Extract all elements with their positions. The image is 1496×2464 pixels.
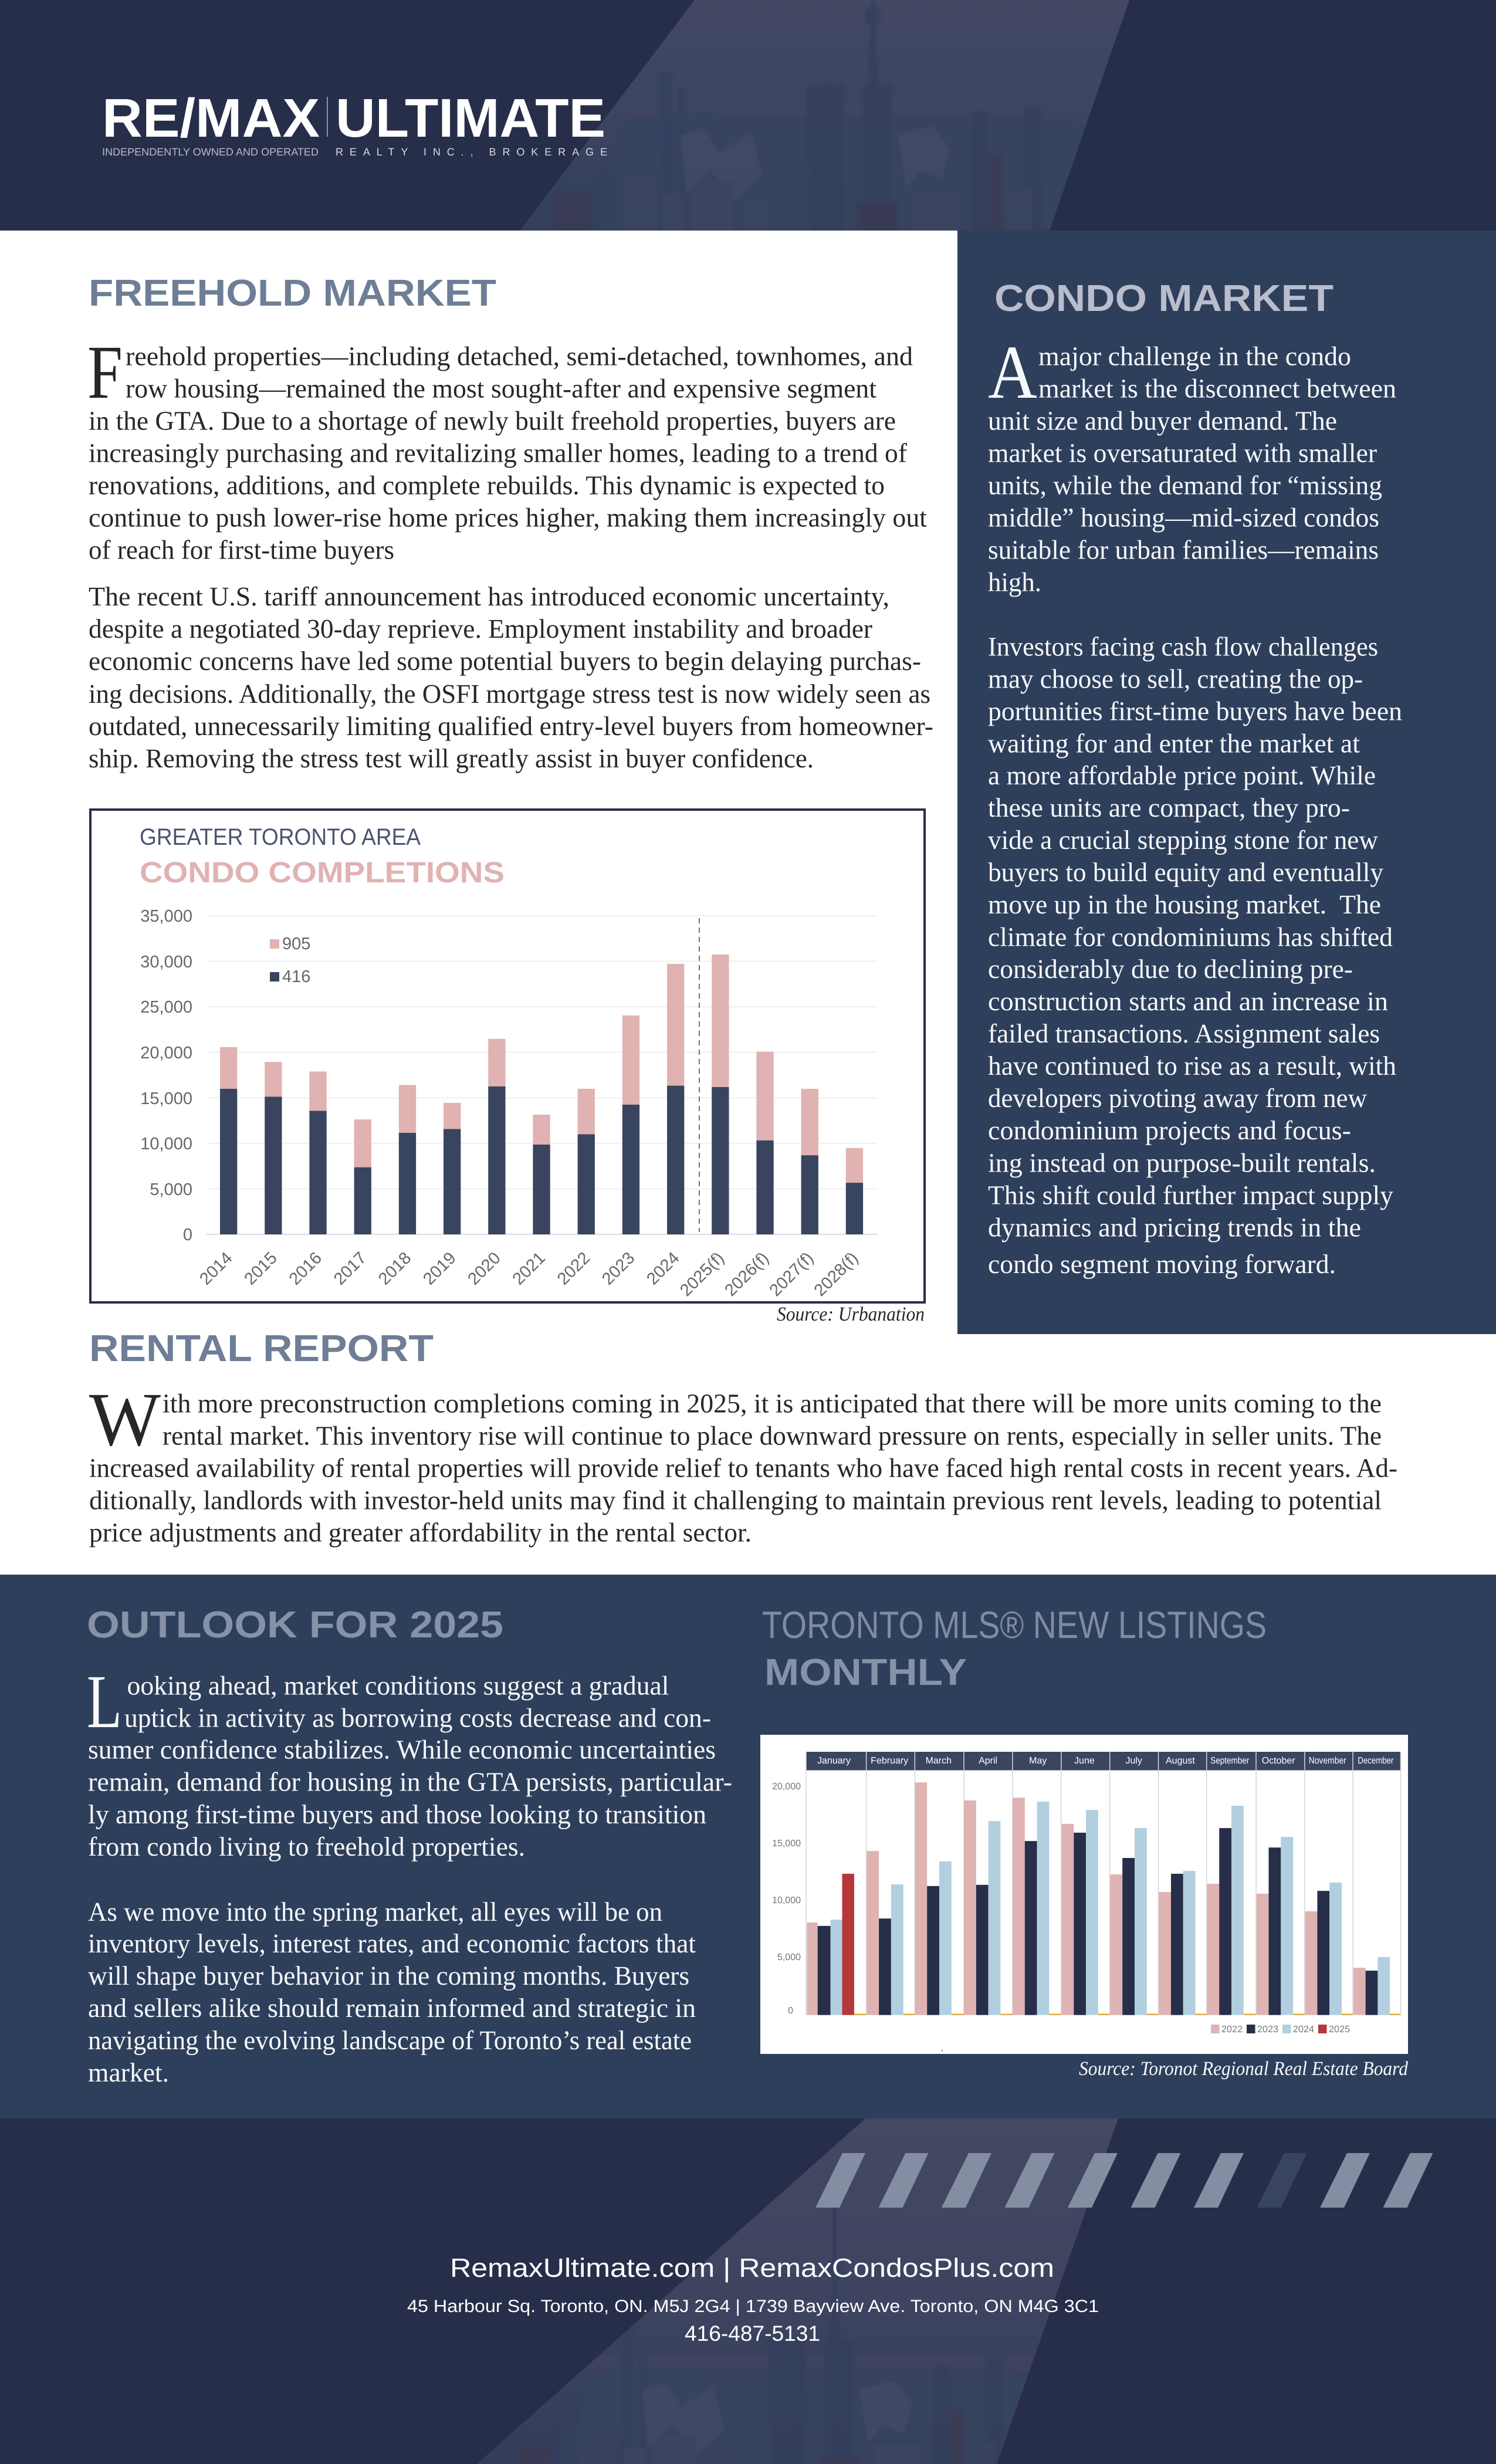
x axis labels: 2014 <box>196 1248 236 1289</box>
text block: freehold paragraph one: reehold properties—including detached, semi-detached, townhomes, and <box>126 341 913 371</box>
text block: outlook paragraph one: L <box>87 1660 122 1744</box>
panel: condo market <box>957 231 1496 1334</box>
stacked bars: 416 series <box>220 1086 863 1234</box>
logo: RE/MAX <box>102 87 320 148</box>
text block: condo paragraph one: major challenge in the condo <box>1038 341 1351 371</box>
text block: outlook paragraph one: remain, demand for housing in the GTA persists, particular- <box>88 1767 732 1797</box>
text block: freehold paragraph two: outdated, unnecessarily limiting qualified entry-level buyers from homeowner- <box>89 711 933 741</box>
chart: condo completions <box>90 810 925 1302</box>
logo <box>102 87 607 158</box>
text block: rental paragraph: ditionally, landlords with investor-held units may find it challenging to maintain previous rent levels, leading to potential <box>89 1485 1382 1515</box>
y axis labels: 10,000 <box>140 1135 192 1153</box>
text block: outlook paragraph two: market. <box>88 2057 169 2087</box>
text block: condo paragraph one: middle” housing—mid-sized condos <box>988 503 1379 533</box>
text block: condo paragraph two: climate for condominiums has shifted <box>988 922 1393 952</box>
text block: outlook paragraph one <box>87 1660 732 1861</box>
text block: outlook paragraph one: uptick in activity as borrowing costs decrease and con- <box>124 1703 711 1732</box>
text block: rental paragraph: price adjustments and greater affordability in the rental sector. <box>89 1518 752 1548</box>
month header row: November <box>1309 1756 1346 1766</box>
x axis labels: 2024 <box>643 1248 683 1289</box>
heading: toronto mls new listings: TORONTO MLS® NEW LISTINGS <box>762 1603 1267 1646</box>
month header row: August <box>1166 1756 1195 1766</box>
bars: 2023 <box>818 1828 1377 2015</box>
x axis labels: 2022 <box>554 1248 594 1289</box>
text block: condo paragraph one: A <box>988 330 1037 415</box>
text block: outlook paragraph two: and sellers alike should remain informed and strategic in <box>88 1993 696 2023</box>
text block: condo paragraph two: condo segment moving forward. <box>988 1249 1336 1279</box>
text block: freehold paragraph two: despite a negotiated 30-day reprieve. Employment instability and broader <box>89 614 872 644</box>
y axis labels: 25,000 <box>140 998 192 1017</box>
chart legend: 2023 <box>1257 2025 1278 2035</box>
month header row: October <box>1262 1756 1295 1766</box>
y axis labels: 5,000 <box>150 1180 192 1199</box>
text block: condo paragraph two: dynamics and pricing trends in the <box>988 1213 1361 1243</box>
text block: condo paragraph two <box>988 631 1402 1279</box>
heading: toronto mls new listings: MONTHLY <box>764 1651 967 1693</box>
contact details <box>407 2253 1099 2345</box>
month header row: December <box>1358 1756 1394 1766</box>
text block: condo paragraph one: units, while the demand for “missing <box>988 471 1382 500</box>
x axis labels: 2017 <box>330 1248 370 1289</box>
text block: condo paragraph two: may choose to sell, creating the op- <box>988 664 1363 694</box>
logo: INDEPENDENTLY OWNED AND OPERATED <box>102 146 319 158</box>
y axis labels: 0 <box>183 1226 192 1244</box>
chart legend: 2024 <box>1293 2025 1314 2035</box>
source: urbanation: Source: Urbanation <box>777 1304 925 1325</box>
x axis labels: 2018 <box>375 1248 415 1289</box>
city skyline beam <box>520 0 1129 236</box>
text block: outlook paragraph one: ooking ahead, market conditions suggest a gradual <box>127 1670 669 1700</box>
chart legend: 2025 <box>1329 2025 1350 2035</box>
chart: monthly new listings <box>760 1735 1408 2054</box>
x axis labels <box>196 1248 862 1300</box>
x axis labels: 2025(f) <box>676 1248 728 1300</box>
chart legend: 2022 <box>1221 2025 1243 2035</box>
y axis labels: 30,000 <box>140 953 192 972</box>
text block: outlook paragraph one: ly among first-time buyers and those looking to transition <box>88 1799 706 1829</box>
y axis labels: 20,000 <box>772 1782 801 1792</box>
text block: freehold paragraph two: ship. Removing the stress test will greatly assist in buyer confidence. <box>89 743 814 773</box>
x axis labels: 2021 <box>509 1248 549 1289</box>
month header row: September <box>1210 1756 1250 1766</box>
text block: condo paragraph two: construction starts and an increase in <box>988 986 1388 1016</box>
text block: freehold paragraph one: F <box>87 330 123 415</box>
header band <box>0 0 1496 236</box>
month header row: March <box>926 1756 952 1766</box>
source: toronto regional real estate board: Source: Toronot Regional Real Estate Board <box>1079 2058 1409 2080</box>
text block: outlook paragraph two: navigating the evolving landscape of Toronto’s real estate <box>88 2025 692 2055</box>
month header row: July <box>1125 1756 1142 1766</box>
month header row: June <box>1074 1756 1095 1766</box>
bars: 2022 <box>807 1782 1366 2015</box>
city skyline beam <box>477 2118 1118 2464</box>
text block: rental paragraph: rental market. This inventory rise will continue to place downward pressure on rents, especially in seller units. The <box>163 1421 1382 1451</box>
text block: freehold paragraph one <box>87 330 927 565</box>
text block: freehold paragraph one: of reach for first-time buyers <box>89 535 394 565</box>
x axis labels: 2028(f) <box>811 1248 862 1300</box>
text block: condo paragraph two: portunities first-time buyers have been <box>988 696 1402 726</box>
text block: condo paragraph one: high. <box>988 567 1041 597</box>
bars: 2024 <box>831 1802 1390 2015</box>
text block: freehold paragraph one: row housing—remained the most sought-after and expensive segment <box>126 374 876 404</box>
text block: condo paragraph two: waiting for and enter the market at <box>988 729 1360 759</box>
text block: condo paragraph one: market is oversaturated with smaller <box>988 438 1377 468</box>
text block: condo paragraph two: have continued to rise as a result, with <box>988 1051 1396 1081</box>
y axis labels: 10,000 <box>772 1896 801 1905</box>
chart title <box>140 824 505 889</box>
x axis labels: 2026(f) <box>721 1248 773 1300</box>
x axis labels: 2023 <box>598 1248 638 1289</box>
text block: outlook paragraph two: inventory levels, interest rates, and economic factors that <box>88 1928 696 1958</box>
bar: january 2025 <box>842 1874 854 2015</box>
contact details: RemaxUltimate.com | RemaxCondosPlus.com <box>450 2253 1054 2283</box>
text block: condo paragraph two: condominium projects and focus- <box>988 1115 1351 1145</box>
y axis labels: 35,000 <box>140 907 192 926</box>
y axis labels: 5,000 <box>777 1952 801 1962</box>
text block: outlook paragraph one: from condo living to freehold properties. <box>88 1832 525 1861</box>
chart legend: 905 <box>282 935 310 953</box>
text block: condo paragraph two: Investors facing cash flow challenges <box>988 631 1378 661</box>
month header row: May <box>1029 1756 1047 1766</box>
text block: rental paragraph <box>89 1377 1397 1548</box>
text block: condo paragraph two: buyers to build equity and eventually <box>988 857 1383 887</box>
text block: outlook paragraph two <box>88 1897 696 2087</box>
text block: condo paragraph two: considerably due to declining pre- <box>988 954 1353 984</box>
y axis labels <box>772 1782 801 2016</box>
text block: rental paragraph: ith more preconstruction completions coming in 2025, it is anticipated that there will be more units coming to the <box>163 1389 1382 1419</box>
text block: outlook paragraph two: will shape buyer behavior in the coming months. Buyers <box>88 1961 689 1991</box>
text block: condo paragraph one: unit size and buyer demand. The <box>988 406 1337 436</box>
panel: freehold market <box>0 231 957 1334</box>
y axis labels: 0 <box>788 2006 793 2016</box>
text block: condo paragraph one <box>988 330 1396 597</box>
text block: freehold paragraph two: economic concerns have led some potential buyers to begin delaying purchas- <box>89 646 921 676</box>
stacked bars: 905 series <box>220 955 863 1183</box>
chart legend: 416 <box>282 967 310 986</box>
text block: rental paragraph: W <box>89 1377 161 1462</box>
month header row: January <box>817 1756 851 1766</box>
logo: ULTIMATE <box>336 87 605 148</box>
heading: condo market: CONDO MARKET <box>994 277 1333 319</box>
chart legend <box>270 935 310 986</box>
chart title: CONDO COMPLETIONS <box>140 856 505 889</box>
logo: REALTY INC., BROKERAGE <box>336 146 607 158</box>
panel: outlook band <box>0 1575 1496 2118</box>
heading: toronto mls new listings <box>762 1603 1267 1693</box>
text block: freehold paragraph one: renovations, additions, and complete rebuilds. This dynamic is expected to <box>89 471 885 500</box>
contact details: 45 Harbour Sq. Toronto, ON. M5J 2G4 | 1739 Bayview Ave. Toronto, ON M4G 3C1 <box>407 2297 1099 2316</box>
x axis labels: 2016 <box>286 1248 326 1289</box>
text block: condo paragraph two: move up in the housing market. The <box>988 889 1381 919</box>
x axis labels: 2027(f) <box>766 1248 817 1300</box>
x axis labels: 2019 <box>419 1248 460 1289</box>
text block: condo paragraph two: these units are compact, they pro- <box>988 793 1350 823</box>
x axis labels: 2020 <box>465 1248 505 1289</box>
text block: freehold paragraph two <box>89 581 933 773</box>
heading: outlook for 2025: OUTLOOK FOR 2025 <box>87 1603 503 1646</box>
contact details: 416-487-5131 <box>685 2321 820 2345</box>
text block: condo paragraph two: failed transactions. Assignment sales <box>988 1018 1380 1048</box>
text block: freehold paragraph one: increasingly purchasing and revitalizing smaller homes, leading to a trend of <box>89 438 908 468</box>
text block: outlook paragraph one: sumer confidence stabilizes. While economic uncertainties <box>88 1735 716 1765</box>
text block: condo paragraph two: vide a crucial stepping stone for new <box>988 825 1379 855</box>
text block: freehold paragraph one: in the GTA. Due to a shortage of newly built freehold properties, buyers are <box>89 406 896 435</box>
decorative stripes <box>815 2153 1433 2208</box>
y axis labels <box>140 907 192 1244</box>
forecast divider <box>699 918 700 1232</box>
footer band <box>0 2118 1496 2464</box>
text block: rental paragraph: increased availability of rental properties will provide relief to tenants who have faced high rental costs in recent years. Ad- <box>89 1453 1397 1483</box>
text block: condo paragraph two: ing instead on purpose-built rentals. <box>988 1148 1376 1178</box>
panel: rental report <box>89 1327 1397 1548</box>
chart title: GREATER TORONTO AREA <box>140 824 421 850</box>
text block: condo paragraph two: a more affordable price point. While <box>988 760 1376 790</box>
month header row <box>806 1752 1401 1771</box>
text block: freehold paragraph two: The recent U.S. tariff announcement has introduced economic uncertainty, <box>89 581 889 611</box>
text block: freehold paragraph one: continue to push lower-rise home prices higher, making them increasingly out <box>89 503 927 533</box>
text block: outlook paragraph two: As we move into the spring market, all eyes will be on <box>88 1897 662 1927</box>
text block: condo paragraph two: developers pivoting away from new <box>988 1083 1368 1113</box>
y axis labels: 15,000 <box>140 1089 192 1108</box>
text block: freehold paragraph two: ing decisions. Additionally, the OSFI mortgage stress test is now widely seen as <box>89 679 930 709</box>
month header row: February <box>871 1756 908 1766</box>
month header row: April <box>979 1756 997 1766</box>
heading: rental report: RENTAL REPORT <box>89 1327 434 1369</box>
text block: condo paragraph one: suitable for urban families—remains <box>988 534 1379 564</box>
chart legend <box>1211 2025 1350 2035</box>
y axis labels: 15,000 <box>772 1839 801 1849</box>
heading: freehold market: FREEHOLD MARKET <box>89 272 496 314</box>
text block: condo paragraph two: This shift could further impact supply <box>988 1180 1393 1210</box>
y axis labels: 20,000 <box>140 1044 192 1062</box>
x axis labels: 2015 <box>241 1248 281 1289</box>
text block: condo paragraph one: market is the disconnect between <box>1038 374 1396 404</box>
